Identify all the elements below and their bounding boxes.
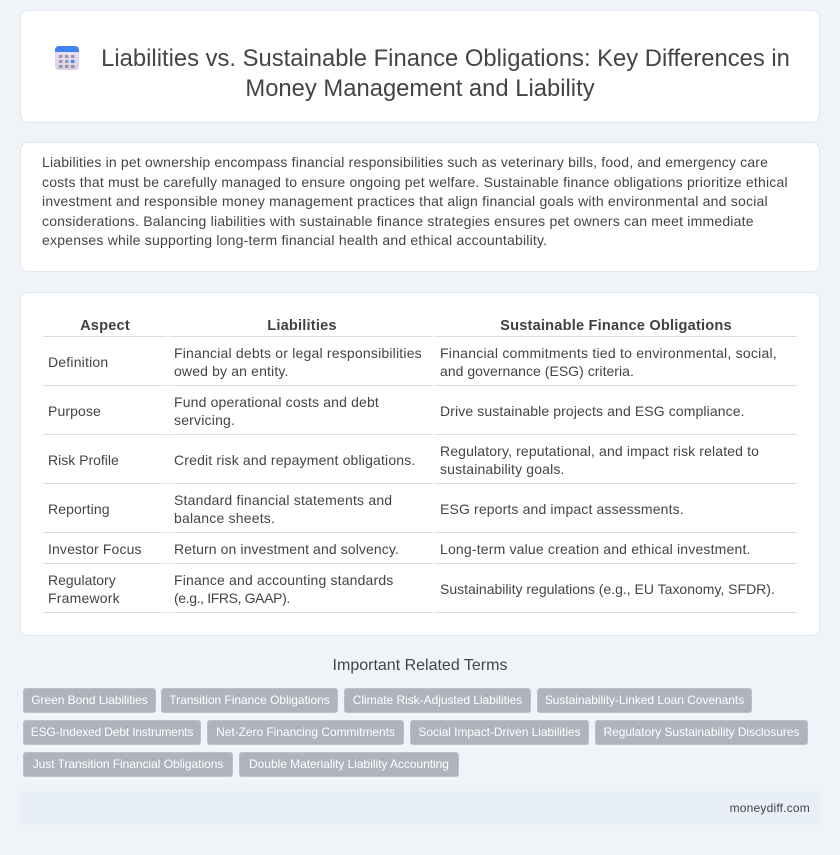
related terms tags: Transition Finance Obligations <box>169 693 330 707</box>
related terms tags: Net-Zero Financing Commitments <box>216 725 395 739</box>
related terms tags: Social Impact-Driven Liabilities <box>418 725 581 739</box>
comparison table <box>43 318 797 613</box>
panel: intro paragraph <box>20 142 820 272</box>
comparison table: ESG reports and impact assessments. <box>440 501 684 517</box>
intro text: Liabilities in pet ownership encompass financial responsibilities such as veterinary bills, food, and emergency care <box>42 154 768 170</box>
comparison table: Investor Focus <box>48 541 142 557</box>
comparison table: Regulatory <box>48 572 116 588</box>
related terms tags: Sustainability-Linked Loan Covenants <box>545 693 744 707</box>
comparison table: sustainability goals. <box>440 461 565 477</box>
intro text <box>42 154 788 248</box>
comparison table: Reporting <box>48 501 110 517</box>
icon: calendar <box>55 46 79 70</box>
comparison table: Purpose <box>48 403 101 419</box>
comparison table: Framework <box>48 590 120 606</box>
title: Money Management and Liability <box>245 75 595 102</box>
comparison table: balance sheets. <box>174 510 275 526</box>
comparison table: Sustainability regulations (e.g., EU Taxonomy, SFDR). <box>440 581 775 597</box>
comparison table: Definition <box>48 354 108 370</box>
comparison table: owed by an entity. <box>174 363 289 379</box>
related terms tags: ESG-Indexed Debt Instruments <box>31 725 193 739</box>
related terms tags: Regulatory Sustainability Disclosures <box>604 725 799 739</box>
comparison table: Drive sustainable projects and ESG compliance. <box>440 403 745 419</box>
related terms tags: Double Materiality Liability Accounting <box>249 757 449 771</box>
related terms tags: Green Bond Liabilities <box>31 693 148 707</box>
comparison table: Liabilities <box>267 318 337 334</box>
intro text: investment and responsible money management practices that align financial goals with environmental and social <box>42 193 768 209</box>
intro text: expenses while supporting long-term financial health and ethical accountability. <box>42 232 547 248</box>
comparison table: Financial commitments tied to environmental, social, <box>440 345 777 361</box>
panel: comparison table <box>20 292 820 636</box>
title: Liabilities vs. Sustainable Finance Obligations: Key Differences in <box>101 45 790 72</box>
intro text: costs that must be carefully managed to ensure ongoing pet welfare. Sustainable finance obligations prioritize ethical <box>42 174 788 190</box>
comparison table: Finance and accounting standards <box>174 572 393 588</box>
comparison table: and governance (ESG) criteria. <box>440 363 634 379</box>
comparison table: Long-term value creation and ethical investment. <box>440 541 751 557</box>
comparison table: Sustainable Finance Obligations <box>500 318 732 334</box>
comparison table: Aspect <box>80 318 130 334</box>
intro text: considerations. Balancing liabilities with sustainable finance strategies ensures pet owners can meet immediate <box>42 212 754 228</box>
title <box>101 45 790 102</box>
panel: header <box>20 10 820 123</box>
comparison table: (e.g., IFRS, GAAP). <box>174 590 290 606</box>
footer text: moneydiff.com: moneydiff.com <box>730 801 810 815</box>
comparison table: Fund operational costs and debt <box>174 394 379 410</box>
related terms tags: Just Transition Financial Obligations <box>33 757 223 771</box>
footer bar <box>20 791 820 825</box>
comparison table: Return on investment and solvency. <box>174 541 399 557</box>
comparison table: Risk Profile <box>48 452 119 468</box>
related terms tags <box>23 688 808 777</box>
comparison table: Credit risk and repayment obligations. <box>174 452 415 468</box>
related terms tags: Climate Risk-Adjusted Liabilities <box>353 693 522 707</box>
heading: related terms: Important Related Terms <box>333 657 507 674</box>
comparison table: Regulatory, reputational, and impact risk related to <box>440 443 759 459</box>
comparison table: Standard financial statements and <box>174 492 392 508</box>
comparison table: servicing. <box>174 412 235 428</box>
comparison table: Financial debts or legal responsibilities <box>174 345 422 361</box>
